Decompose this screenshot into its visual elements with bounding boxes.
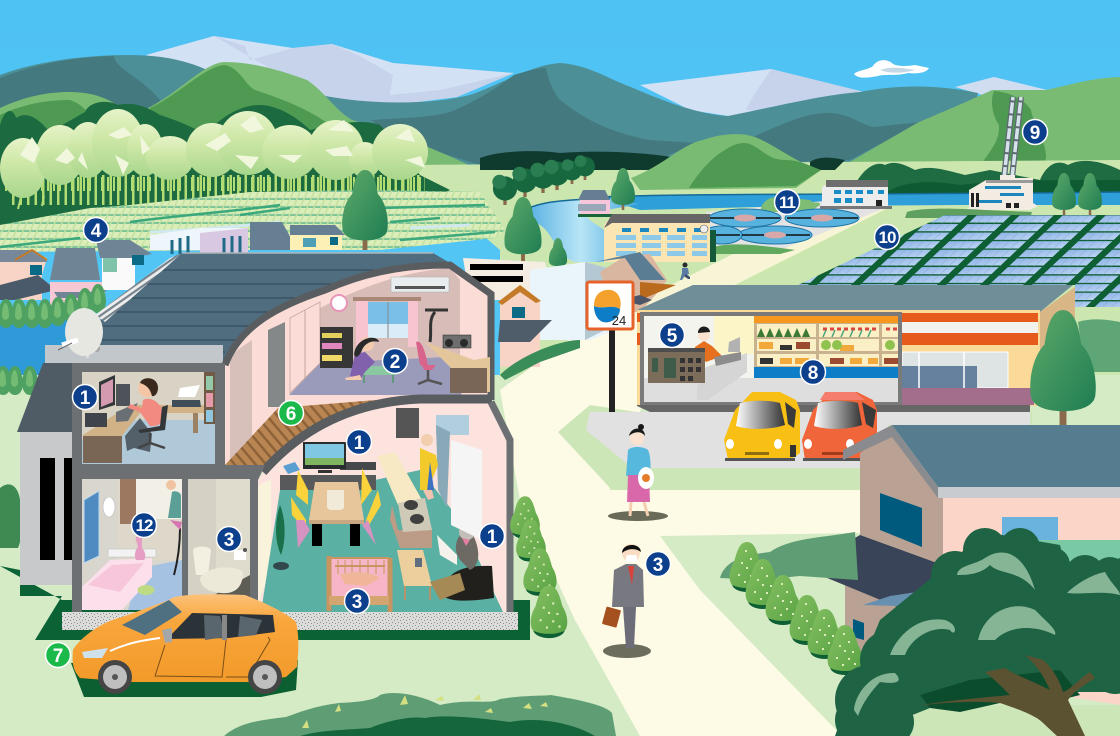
tan gable wall — [860, 430, 943, 563]
left river — [0, 320, 70, 375]
small pink house — [578, 190, 613, 217]
right field of shrubs — [1078, 319, 1120, 372]
fax phone — [172, 400, 201, 407]
conifer tree beside field — [342, 170, 388, 250]
bush behind tanks — [760, 197, 820, 212]
badge 12: 12 — [136, 516, 153, 535]
computer — [99, 375, 115, 410]
air conditioner — [391, 277, 449, 292]
low hedge — [714, 244, 795, 254]
cone shrubs by path — [730, 542, 862, 675]
slate roof — [892, 425, 1120, 487]
bedroom back wall — [320, 268, 460, 365]
toilet room — [188, 479, 258, 612]
clarifier tank plant — [702, 197, 890, 254]
badge 3 crib — [344, 588, 370, 614]
purple base — [902, 388, 1034, 405]
paper holder — [234, 550, 246, 560]
yellow car — [724, 392, 800, 461]
boom box — [443, 335, 471, 348]
school building — [604, 214, 716, 262]
bathtub — [82, 558, 152, 610]
round lamp — [103, 497, 115, 517]
desk — [83, 405, 204, 463]
shelves — [754, 316, 898, 378]
rice fields — [0, 190, 505, 252]
toilet — [193, 547, 211, 575]
ground floor frame — [72, 363, 265, 612]
dark green house base — [0, 566, 530, 640]
multi-function machine — [648, 348, 705, 383]
badge 4 — [84, 218, 108, 242]
satellite dish — [58, 308, 103, 358]
mother in kitchen — [420, 448, 438, 490]
person at sink — [168, 491, 181, 518]
porch roof — [803, 535, 937, 608]
centre hill — [631, 134, 821, 190]
store window — [902, 352, 1008, 388]
elderly person seated — [442, 566, 494, 601]
badge 1 grandfather — [480, 524, 504, 548]
stacks — [1004, 97, 1021, 178]
phone on stand — [283, 462, 300, 474]
living room furniture — [273, 408, 494, 613]
roof — [45, 253, 450, 363]
mirror — [162, 628, 172, 643]
low table — [397, 550, 432, 586]
dark under canopy — [920, 670, 1080, 712]
roof underside arch — [225, 265, 491, 400]
plant — [276, 505, 285, 555]
background town buildings beside house — [463, 252, 676, 380]
bookshelf — [204, 372, 215, 424]
tall pale building — [530, 262, 615, 340]
office chair — [138, 405, 168, 433]
store side wall — [1040, 287, 1075, 380]
parking lot and verge — [558, 405, 1032, 490]
white crown highlights — [20, 115, 425, 175]
clerk — [694, 326, 722, 362]
hedge bushes — [500, 340, 580, 380]
green hills — [0, 62, 1120, 195]
closet doors — [290, 302, 320, 393]
car body — [73, 594, 298, 682]
main road — [500, 320, 860, 736]
green basin — [138, 585, 154, 595]
village small houses — [150, 222, 345, 254]
tv stand — [280, 475, 376, 490]
village — [0, 222, 345, 305]
back road — [590, 206, 892, 325]
highlight — [110, 638, 160, 651]
businessman with mask — [602, 544, 651, 658]
television — [303, 442, 346, 469]
porch light — [863, 588, 970, 607]
chairs — [291, 468, 381, 530]
side gable wall — [17, 363, 72, 585]
wood floor — [225, 398, 400, 466]
cloud — [854, 60, 929, 78]
badge 1 grandfather: 1 — [487, 527, 498, 548]
window and curtains — [353, 297, 421, 351]
left door — [230, 340, 252, 463]
badge 2: 2 — [390, 352, 400, 373]
gable edge — [843, 425, 938, 498]
badge 3 businessman: 3 — [653, 555, 663, 576]
plant hedge — [905, 209, 1032, 218]
badge 9 — [1022, 120, 1048, 144]
stage: background river — [521, 192, 1120, 262]
badge 5 — [660, 322, 684, 348]
red car — [802, 392, 877, 461]
shrubs near house right side — [510, 496, 567, 638]
hedge by road — [720, 532, 858, 580]
wheels — [98, 660, 282, 694]
solar panel field — [798, 215, 1120, 307]
badge 10 — [874, 224, 900, 250]
bookcase — [320, 327, 353, 368]
store base — [637, 405, 1030, 412]
badge 6: 6 — [286, 404, 296, 425]
distant snowy mountains — [146, 36, 1047, 116]
counter with register — [697, 337, 747, 400]
badge 1 living room: 1 — [354, 433, 365, 454]
bedroom floor — [289, 357, 462, 395]
lower living room wall — [258, 402, 510, 612]
floor arch — [263, 399, 492, 472]
canopy highlights — [854, 553, 1120, 716]
kitchen hood — [396, 408, 419, 438]
fascia — [938, 487, 1120, 498]
brown gable houses — [595, 252, 676, 312]
blue floor — [128, 560, 182, 610]
dining table — [309, 482, 364, 520]
foreground lawn ground — [0, 375, 1120, 736]
dark distant tree lines — [480, 151, 845, 170]
large foreground tree — [835, 528, 1120, 736]
bottom hedge — [224, 693, 616, 736]
orange car — [71, 594, 298, 697]
foreground house — [803, 425, 1120, 705]
lower tan wall — [845, 535, 943, 680]
badge 10: 10 — [879, 228, 896, 247]
wall clock — [331, 295, 347, 311]
village lower-left houses — [0, 240, 152, 305]
tree canopy — [835, 528, 1120, 736]
woman with shopping bag — [608, 424, 668, 521]
pink chair — [416, 342, 436, 370]
bottle — [135, 536, 145, 560]
shower hose — [174, 528, 180, 575]
office worker — [125, 418, 152, 452]
headlight — [82, 648, 108, 658]
green tree line right — [850, 161, 1120, 197]
bedroom furniture — [320, 277, 490, 393]
side windows — [167, 613, 275, 639]
foundation — [62, 612, 518, 630]
white factory building — [820, 180, 892, 209]
badge 1 office — [72, 384, 98, 410]
badge 7: 7 — [53, 646, 63, 667]
conifers along river — [504, 168, 1102, 270]
teal mountains — [0, 55, 978, 168]
badge 6 — [278, 400, 304, 426]
door lines — [155, 637, 270, 677]
left shrub row — [0, 284, 106, 395]
thermos — [327, 490, 344, 510]
low table with girl — [360, 366, 397, 375]
door panel — [258, 479, 271, 603]
hall door — [268, 322, 285, 407]
badge 7 — [46, 642, 70, 668]
tanks — [702, 209, 859, 244]
store sign — [587, 282, 633, 412]
pale tree crowns — [0, 109, 428, 198]
kitchen counter — [377, 452, 432, 548]
cutaway interior — [637, 314, 1030, 412]
small lower window — [853, 619, 864, 640]
badge 11 — [774, 190, 800, 214]
study desk — [425, 342, 490, 392]
plant building — [966, 175, 1038, 210]
pink wall — [900, 498, 1120, 705]
gable window — [880, 493, 922, 547]
cutaway house — [17, 253, 518, 630]
badge 4: 4 — [91, 221, 102, 242]
upper walls — [223, 265, 490, 466]
refrigerator — [451, 440, 482, 540]
desk lamp — [425, 310, 448, 342]
badge 11: 11 — [779, 193, 796, 212]
car shadow — [71, 660, 298, 697]
outer right wall — [491, 402, 510, 612]
crib — [329, 556, 390, 613]
badge 8: 8 — [808, 363, 818, 384]
bush at left edge — [0, 484, 21, 548]
bathroom — [82, 479, 188, 612]
ground under tree — [890, 705, 1120, 736]
badge 12 — [132, 512, 156, 538]
store front wall — [637, 310, 1040, 406]
blind window — [84, 491, 99, 563]
tree trunk — [917, 655, 1095, 736]
badge 3 toilet: 3 — [224, 530, 234, 551]
badge 3 businessman — [646, 552, 670, 576]
store roof — [637, 285, 1073, 312]
back wall to floor — [644, 378, 898, 402]
power plant with twin stacks — [905, 97, 1038, 218]
light green valley ground — [400, 160, 1120, 440]
dark forest backdrop — [0, 102, 450, 225]
white apartment — [463, 258, 548, 300]
running child — [680, 262, 690, 280]
badge 1 office: 1 — [80, 388, 91, 409]
number badges — [46, 120, 1048, 668]
lime trunks — [5, 184, 425, 209]
forest — [0, 102, 450, 225]
tile band — [108, 549, 156, 557]
office room — [82, 372, 215, 464]
badge 3 toilet — [216, 526, 242, 552]
store sign: 24 — [612, 313, 626, 328]
badge 3 crib: 3 — [352, 592, 362, 613]
badge 9: 9 — [1030, 123, 1040, 144]
windshield — [122, 600, 182, 635]
badge 8 — [800, 360, 826, 384]
right foreground conifer — [1030, 310, 1096, 425]
house right of cutaway — [498, 285, 552, 367]
badge 2 — [382, 348, 408, 374]
badge 1 living room — [346, 430, 372, 454]
living room floor — [261, 470, 503, 612]
badge 5: 5 — [667, 326, 678, 347]
green fence — [1028, 540, 1120, 568]
upper round window — [1002, 517, 1058, 541]
orange stripes — [637, 313, 1038, 345]
round trees — [492, 155, 595, 205]
